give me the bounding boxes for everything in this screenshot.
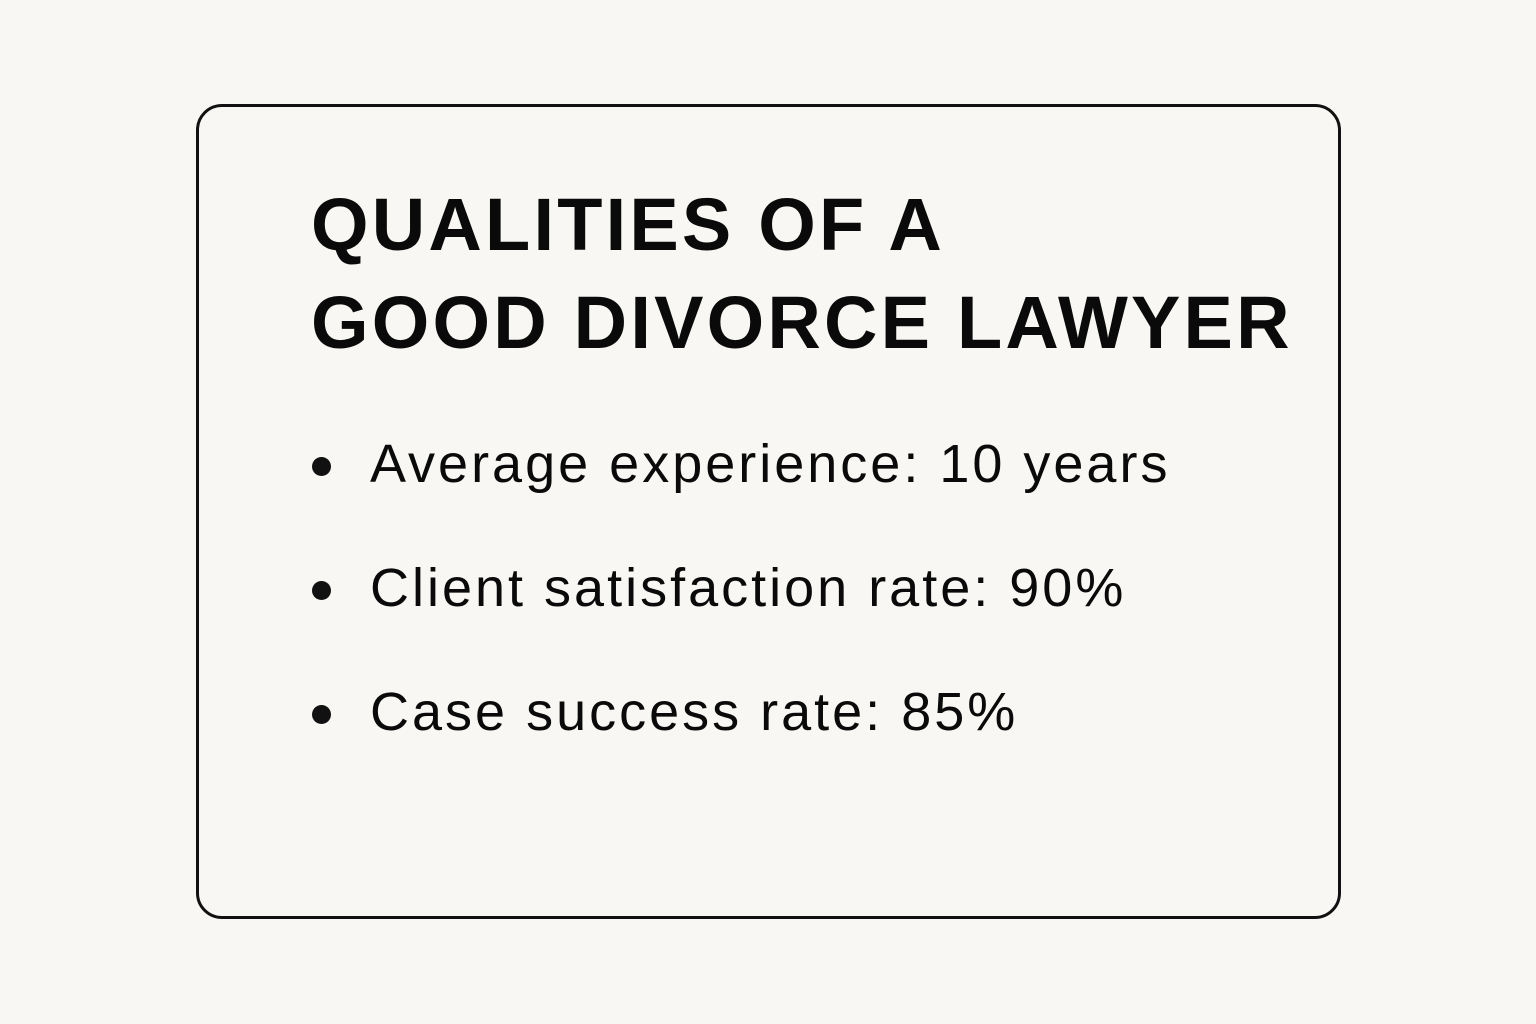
- text: case success: Case success rate: 85%: [370, 682, 1018, 742]
- text: client satisfaction: Client satisfaction rate: 90%: [370, 558, 1126, 618]
- bullet 1: [312, 457, 331, 476]
- title: QUALITIES OF A: [311, 183, 945, 266]
- title: GOOD DIVORCE LAWYER: [311, 281, 1293, 364]
- list: qualities: [312, 434, 1170, 742]
- bullet 2: [312, 581, 331, 600]
- bullet 3: [312, 705, 331, 724]
- title: [311, 183, 1293, 364]
- text: average experience: Average experience: 10 years: [370, 434, 1170, 494]
- panel: card: [196, 104, 1341, 919]
